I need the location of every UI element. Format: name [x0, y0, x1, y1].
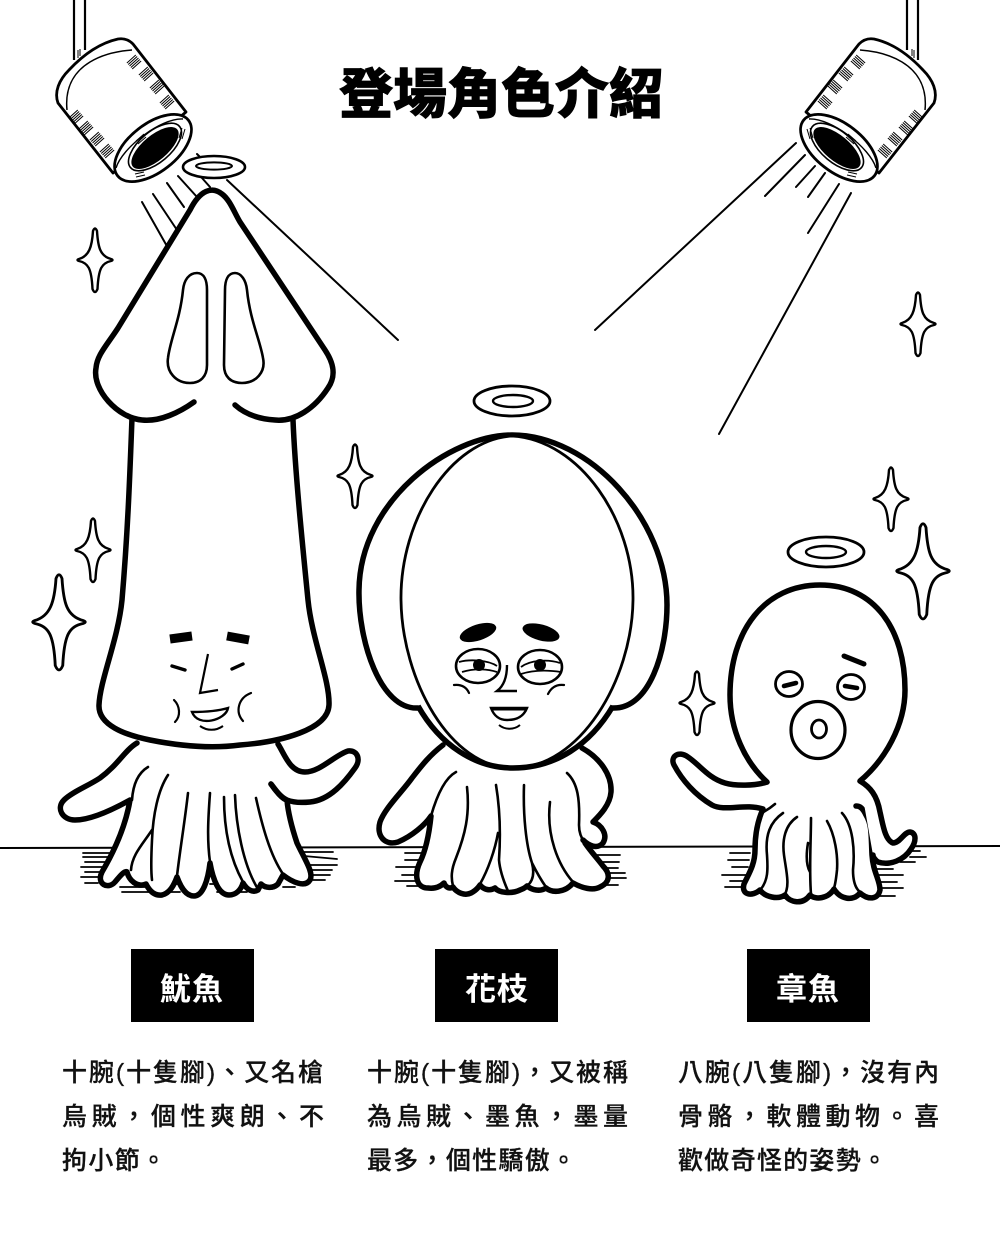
cuttlefish face	[454, 619, 564, 729]
label: octopus: 章魚	[776, 964, 840, 1009]
left light beams	[142, 154, 398, 340]
label: squid	[131, 949, 254, 1022]
squid tentacles	[60, 743, 358, 896]
label: squid: 魷魚	[160, 964, 224, 1009]
sparkle 2	[900, 292, 936, 356]
text: cuttlefish description: 為烏賊、墨魚，墨量	[367, 1097, 628, 1133]
right light beams	[595, 143, 851, 434]
octopus tentacles	[673, 754, 915, 902]
squid body	[99, 418, 329, 747]
cuttlefish head	[401, 436, 633, 768]
cuttlefish floor hatching	[395, 853, 626, 886]
title: 登場角色介紹	[339, 50, 663, 129]
text: cuttlefish description	[367, 1053, 628, 1177]
text: squid description: 拘小節。	[62, 1141, 166, 1177]
ground line	[0, 846, 1000, 848]
text: cuttlefish description: 最多，個性驕傲。	[367, 1141, 576, 1177]
spotlight: left	[57, 0, 398, 340]
squid floor hatching	[81, 852, 337, 892]
sparkle 7	[897, 524, 949, 619]
character: squid	[60, 156, 358, 896]
cuttlefish tentacles	[379, 745, 611, 894]
text: squid description	[62, 1053, 324, 1177]
sparkle 5	[33, 575, 85, 670]
cuttlefish halo	[474, 386, 550, 416]
left lamp	[57, 0, 203, 195]
character: octopus	[673, 537, 926, 902]
squid halo	[183, 156, 245, 178]
octopus head	[730, 585, 905, 782]
character: cuttlefish	[359, 386, 667, 894]
label: octopus	[747, 949, 870, 1022]
text: octopus description	[678, 1053, 939, 1177]
text: octopus description: 骨骼，軟體動物。喜	[678, 1097, 939, 1133]
sparkle 4	[76, 518, 110, 582]
text: squid description: 十腕(十隻腳)、又名槍	[62, 1053, 323, 1089]
octopus floor hatching	[722, 851, 926, 896]
text: cuttlefish description: 十腕(十隻腳)，又被稱	[367, 1053, 628, 1089]
octopus halo	[788, 537, 864, 567]
label: cuttlefish: 花枝	[465, 964, 529, 1009]
sparkle 8	[680, 672, 714, 735]
text: octopus description: 八腕(八隻腳)，沒有內	[678, 1053, 939, 1089]
spotlight: right	[595, 0, 935, 434]
label: cuttlefish	[435, 949, 558, 1022]
right lamp	[789, 0, 935, 195]
sparkles	[33, 228, 949, 735]
cuttlefish chin line	[418, 706, 613, 768]
sparkle 1	[78, 228, 112, 292]
text: octopus description: 歡做奇怪的姿勢。	[678, 1141, 887, 1177]
cuttlefish outer fins	[359, 435, 667, 708]
squid fin slits	[168, 273, 264, 383]
octopus face	[776, 656, 864, 758]
sparkle 6	[874, 468, 908, 531]
text: squid description: 烏賊，個性爽朗、不	[62, 1097, 324, 1133]
sparkle 3	[338, 444, 372, 508]
squid face	[170, 636, 251, 730]
squid fin	[96, 190, 333, 420]
